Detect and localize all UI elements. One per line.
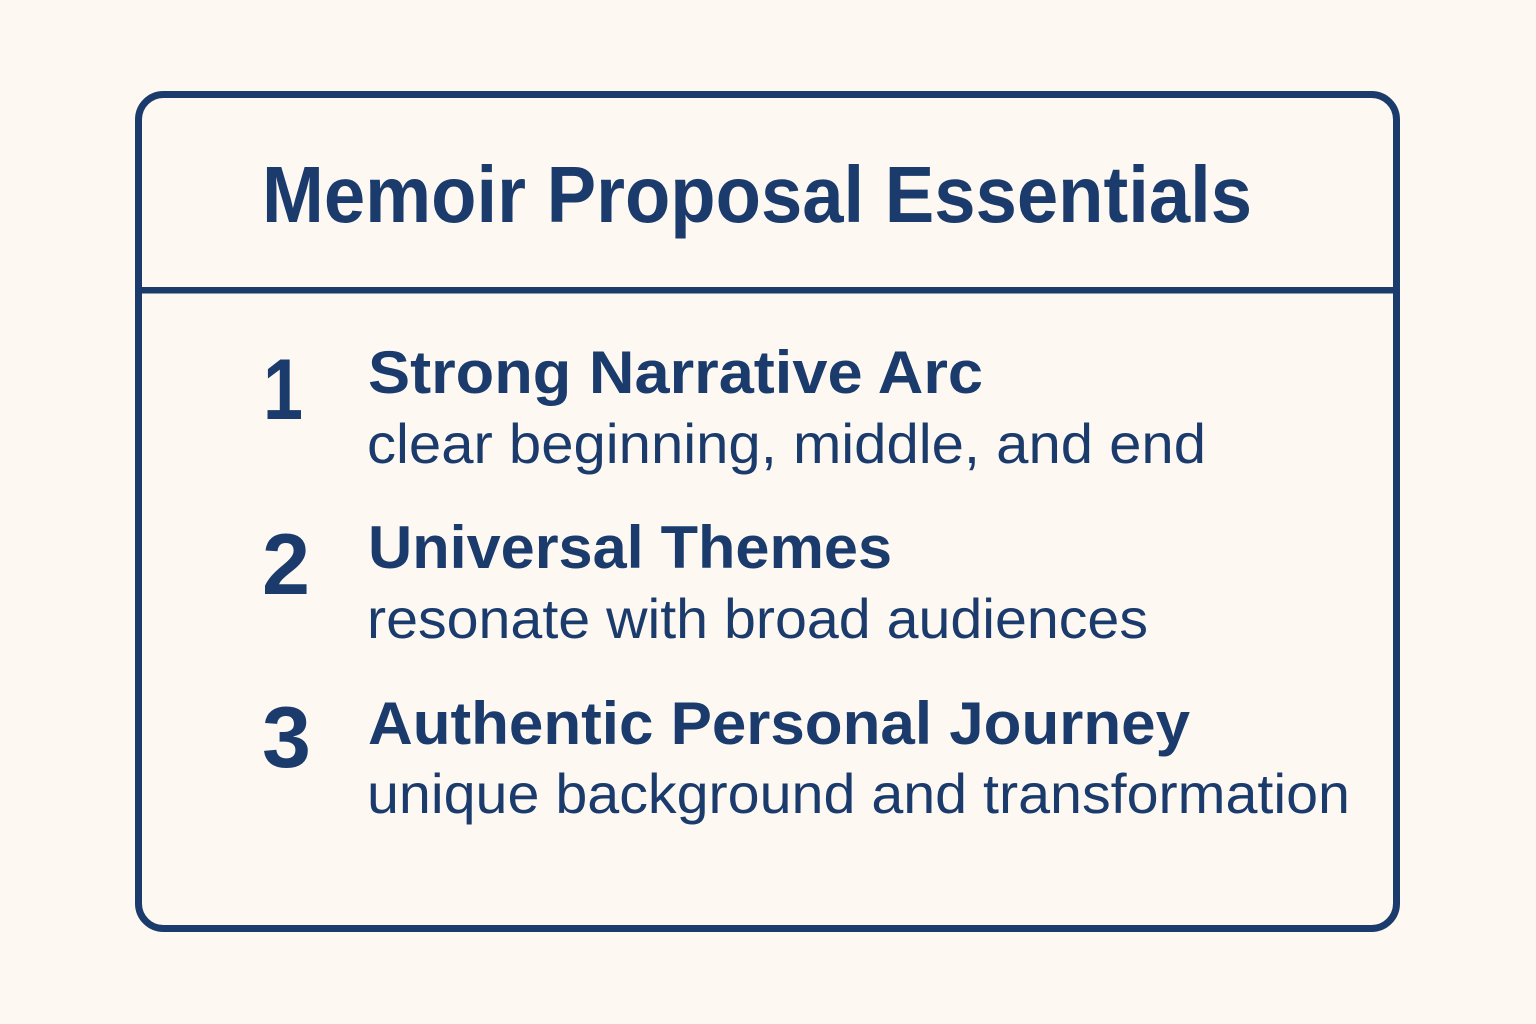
- panel: card outline: [138, 94, 1396, 928]
- header divider: [138, 287, 1396, 294]
- item 1 heading: Strong Narrative Arc: [368, 339, 983, 406]
- item 2: universal themes: [262, 514, 1148, 650]
- item 3 description: unique background and transformation: [367, 762, 1350, 825]
- item 3: authentic personal journey: [262, 690, 1350, 825]
- item 2 heading: Universal Themes: [368, 514, 892, 581]
- item 2 description: resonate with broad audiences: [367, 587, 1148, 650]
- item 1 description: clear beginning, middle, and end: [367, 412, 1206, 475]
- title: Memoir Proposal Essentials: [262, 150, 1252, 239]
- item 3 heading: Authentic Personal Journey: [368, 690, 1191, 757]
- number 2: 2: [262, 517, 310, 613]
- number 1: 1: [263, 342, 303, 438]
- number 3: 3: [262, 690, 311, 786]
- item 1: strong narrative arc: [263, 339, 1206, 475]
